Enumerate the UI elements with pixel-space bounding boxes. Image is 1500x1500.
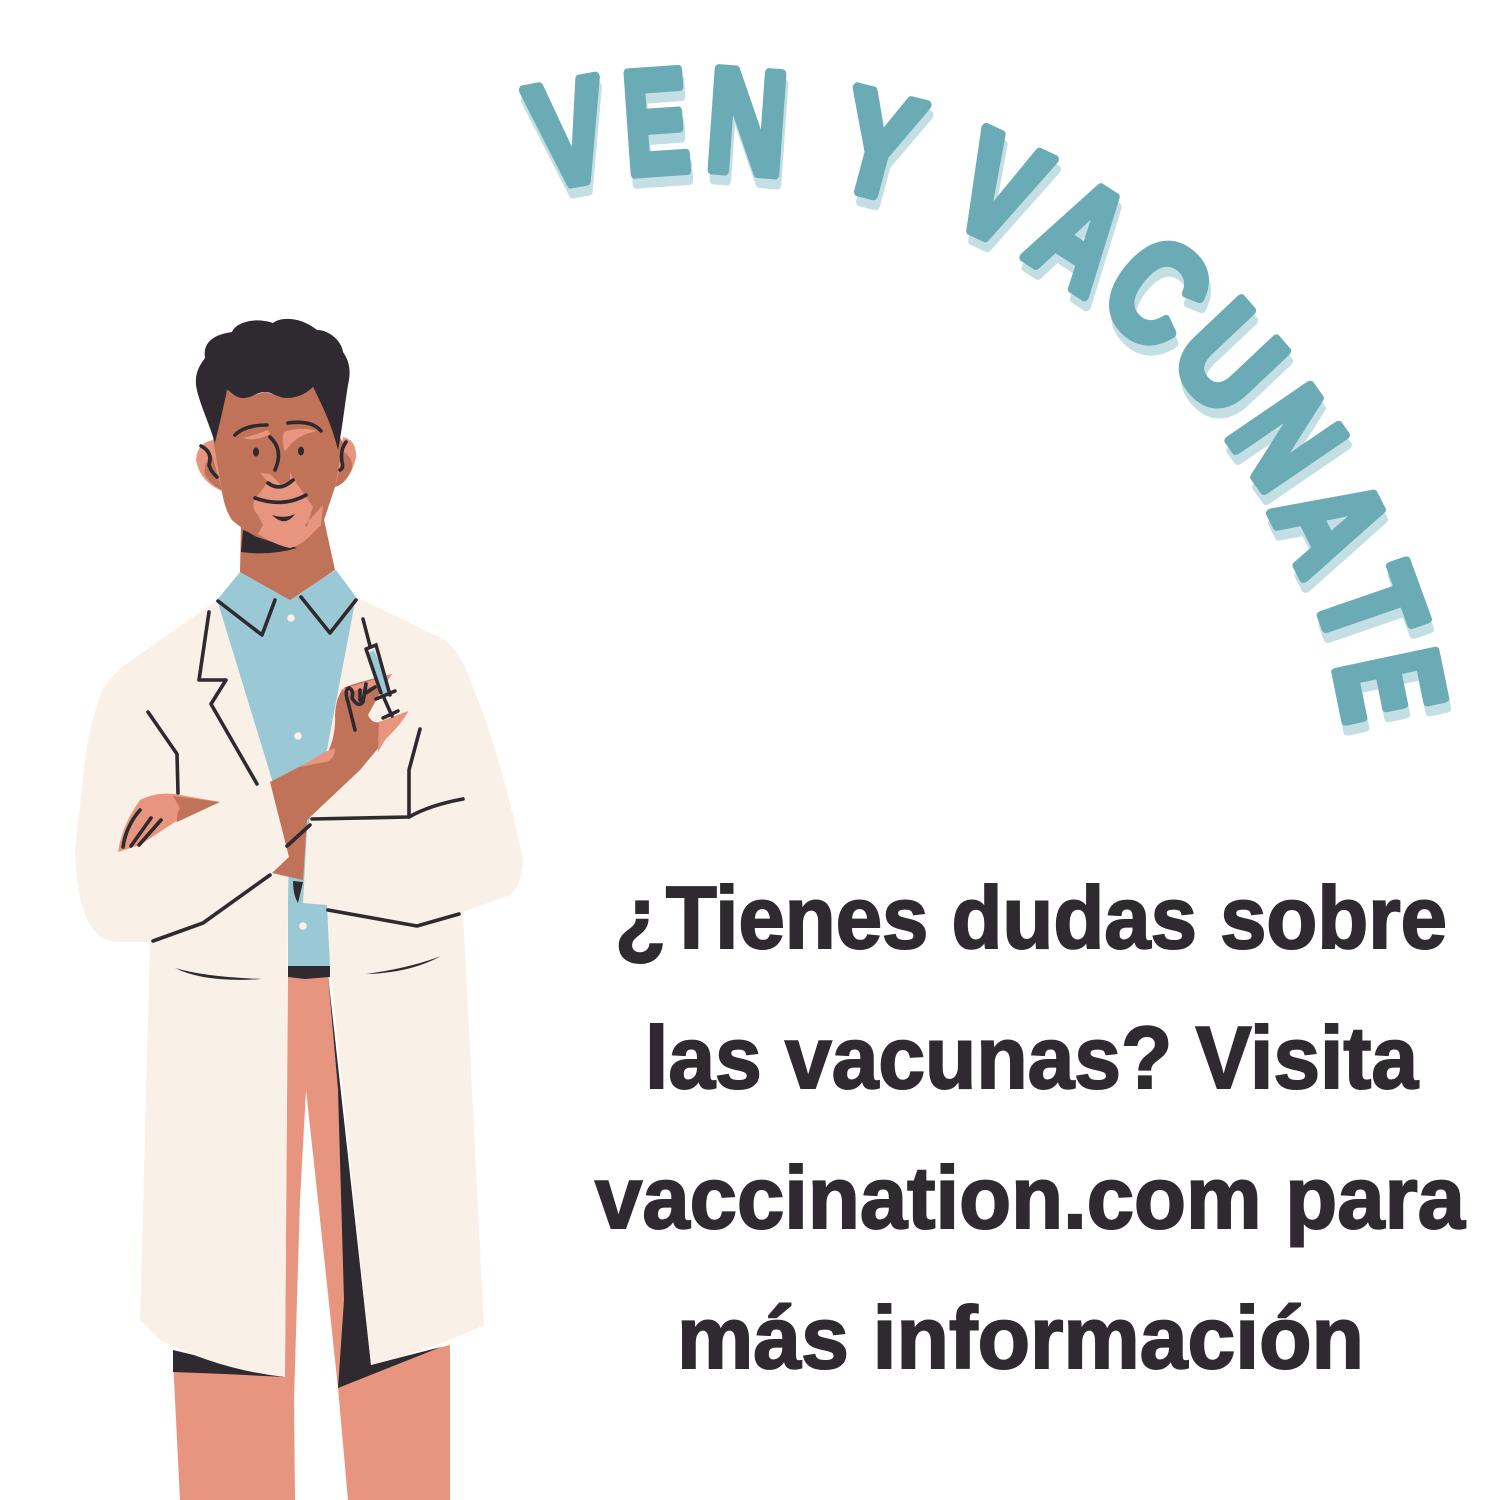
title main layer: A <box>1241 453 1423 595</box>
title main layer: N <box>1200 362 1375 514</box>
coat line art <box>123 597 463 941</box>
title shadow layer: C <box>1077 215 1241 390</box>
tie tip shadow <box>293 881 303 903</box>
illustration: doctor with syringe <box>75 319 523 1500</box>
title main layer <box>516 38 1477 732</box>
title main layer: V <box>930 99 1069 278</box>
face <box>213 387 343 548</box>
shirt <box>217 570 356 966</box>
title shadow layer: E <box>620 49 696 216</box>
title shadow layer: V <box>932 109 1071 288</box>
smile <box>272 514 295 521</box>
title shadow layer: V <box>518 55 624 230</box>
eyes <box>253 448 259 456</box>
title shadow layer <box>518 48 1479 742</box>
pocket left <box>175 968 262 980</box>
neck <box>240 515 335 600</box>
title shadow layer: N <box>704 48 794 217</box>
title shadow layer: A <box>1006 156 1159 335</box>
text block: call to action: vaccination.com para <box>595 1148 1466 1247</box>
shorts shadow <box>173 966 441 1388</box>
title main layer: U <box>1145 273 1313 443</box>
title shadow layer: A <box>1243 463 1425 605</box>
left hand <box>118 794 220 852</box>
text block: call to action: ¿Tienes dudas sobre <box>615 868 1447 967</box>
ears <box>196 437 356 491</box>
face highlight <box>243 429 323 548</box>
pocket right <box>366 956 441 974</box>
title main layer: T <box>1284 549 1457 663</box>
title main layer: N <box>702 38 792 207</box>
facial lines <box>201 422 346 502</box>
arm highlight <box>300 674 408 767</box>
coat right panel <box>303 597 523 1365</box>
text block: call to action: más información <box>677 1288 1364 1387</box>
left hand shadow <box>173 796 220 822</box>
title shadow layer: U <box>1147 283 1315 453</box>
neck shadow <box>241 530 297 553</box>
title shadow layer: N <box>1202 372 1377 524</box>
head <box>196 319 356 548</box>
title shadow layer: E <box>1307 647 1479 742</box>
title main layer: C <box>1075 205 1239 380</box>
title: curved heading VEN Y VACUNATE <box>516 38 1479 742</box>
coat left panel <box>75 600 289 1377</box>
title main layer: E <box>618 39 694 206</box>
legs <box>173 972 450 1500</box>
text block: call to action <box>595 868 1466 1387</box>
text block: call to action: las vacunas? Visita <box>645 1008 1419 1107</box>
hair <box>196 319 350 450</box>
title main layer: Y <box>821 56 938 233</box>
title main layer: V <box>516 45 622 220</box>
title main layer: A <box>1004 146 1157 325</box>
title main layer: E <box>1305 637 1477 732</box>
arm holding syringe <box>270 674 408 880</box>
title shadow layer: Y <box>823 66 940 243</box>
title shadow layer: T <box>1286 559 1459 673</box>
shirt buttons <box>287 614 307 930</box>
syringe <box>363 619 398 718</box>
